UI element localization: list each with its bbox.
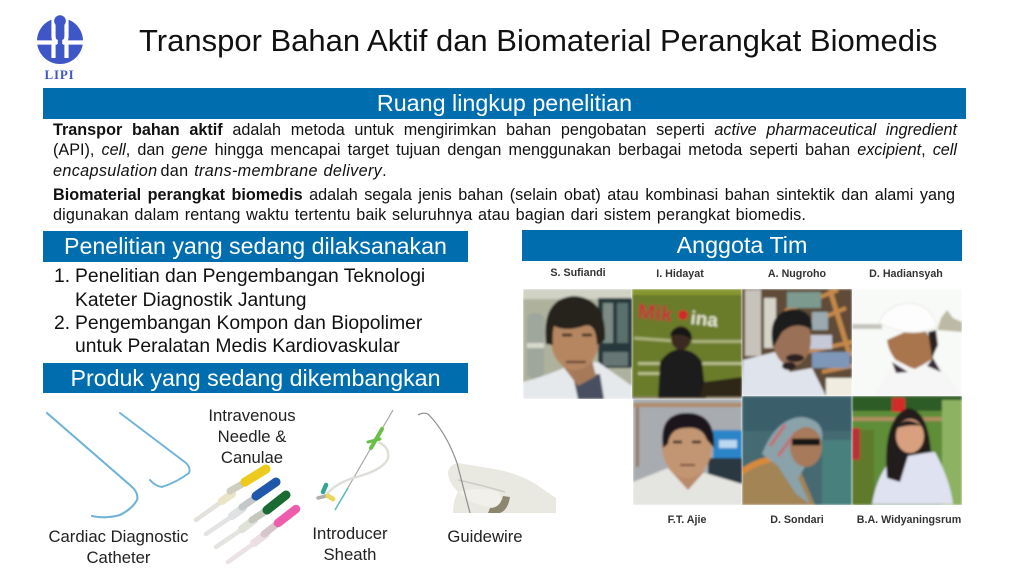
label: Intravenous Needle & Canulae [208,406,296,467]
text block: scope description: Biomaterial perangkat biomedis adalah segala jenis bahan (selain obat) atau kombinasi bahan sintektik dan alami yang [53,186,955,204]
photo: I. Hidayat: Mik [636,300,674,327]
photo: A. Nugroho [742,289,852,396]
photo: I. Hidayat: ina [689,308,719,332]
photo: D. Sondari [742,396,852,505]
list: ongoing research: 1. [54,266,70,287]
label: Introducer Sheath: Sheath [324,545,376,564]
text block: scope description: digunakan dalam rentang waktu tertentu baik seluruhnya atau bagian dari sistem perangkat biomedis. [53,206,806,224]
icon: introducer sheath [316,410,394,510]
list: ongoing research: untuk Peralatan Medis Kardiovaskular [75,336,400,357]
heading: Anggota Tim: Anggota Tim [677,232,807,258]
team photos [523,289,962,505]
label: Introducer Sheath: Introducer [312,524,388,543]
photo: D. Hadiansyah [852,301,962,394]
heading: Anggota Tim [522,230,962,261]
label: I. Hidayat: I. Hidayat [656,268,704,280]
label: Guidewire: Guidewire [447,527,523,546]
label: B.A. Widyaningsrum: B.A. Widyaningsrum [857,514,961,526]
label: Cardiac Diagnostic Catheter: Catheter [86,548,150,567]
text block: scope description [53,121,958,224]
photo: B.A. Widyaningsrum [852,396,962,505]
list: ongoing research: Pengembangan Kompon dan Biopolimer [75,313,422,334]
heading: Ruang lingkup penelitian: Ruang lingkup penelitian [377,90,632,116]
label: D. Hadiansyah: D. Hadiansyah [869,268,943,280]
heading: Penelitian yang sedang dilaksanakan: Penelitian yang sedang dilaksanakan [64,233,447,259]
icon: cardiac diagnostic catheters [46,412,190,518]
list: ongoing research: Kateter Diagnostik Jantung [75,290,307,311]
label: Intravenous Needle & Canulae: Canulae [221,448,283,467]
label: Intravenous Needle & Canulae: Intravenous [208,406,296,425]
logo: LIPI [37,15,83,82]
label: Cardiac Diagnostic Catheter: Cardiac Diagnostic [48,527,189,546]
list: ongoing research: 2. [54,313,70,334]
label: Cardiac Diagnostic Catheter [48,527,189,567]
label: S. Sufiandi: S. Sufiandi [550,267,606,279]
heading: Produk yang sedang dikembangkan: Produk yang sedang dikembangkan [70,365,440,391]
text block: scope description: encapsulationdan trans-membrane delivery. [53,162,387,180]
label: D. Sondari: D. Sondari [770,514,824,526]
list: ongoing research [54,266,425,357]
label: Introducer Sheath [312,524,388,564]
list: ongoing research: Penelitian dan Pengembangan Teknologi [75,266,425,287]
logo: LIPI: LIPI [45,67,74,82]
icon: intravenous needles [194,464,300,564]
icon: guidewire in gloved hand [418,412,556,514]
photo: F.T. Ajie [633,399,742,505]
text block: scope description: Transpor bahan aktif adalah metoda untuk mengirimkan bahan pengobatan seperti active pharmaceutical ingredient [53,121,957,139]
label: F.T. Ajie: F.T. Ajie [668,514,706,526]
title: Transpor Bahan Aktif dan Biomaterial Perangkat Biomedis [139,23,937,58]
text block: scope description: (API), cell, dan gene hingga mencapai target tujuan dengan menggunakan berbagai metoda seperti bahan excipient, cell [53,141,957,159]
photo: I. Hidayat [632,289,742,399]
heading: Ruang lingkup penelitian [43,88,966,119]
photo: S. Sufiandi [523,289,632,399]
label: A. Nugroho: A. Nugroho [768,268,826,280]
label: Intravenous Needle & Canulae: Needle & [218,427,286,446]
